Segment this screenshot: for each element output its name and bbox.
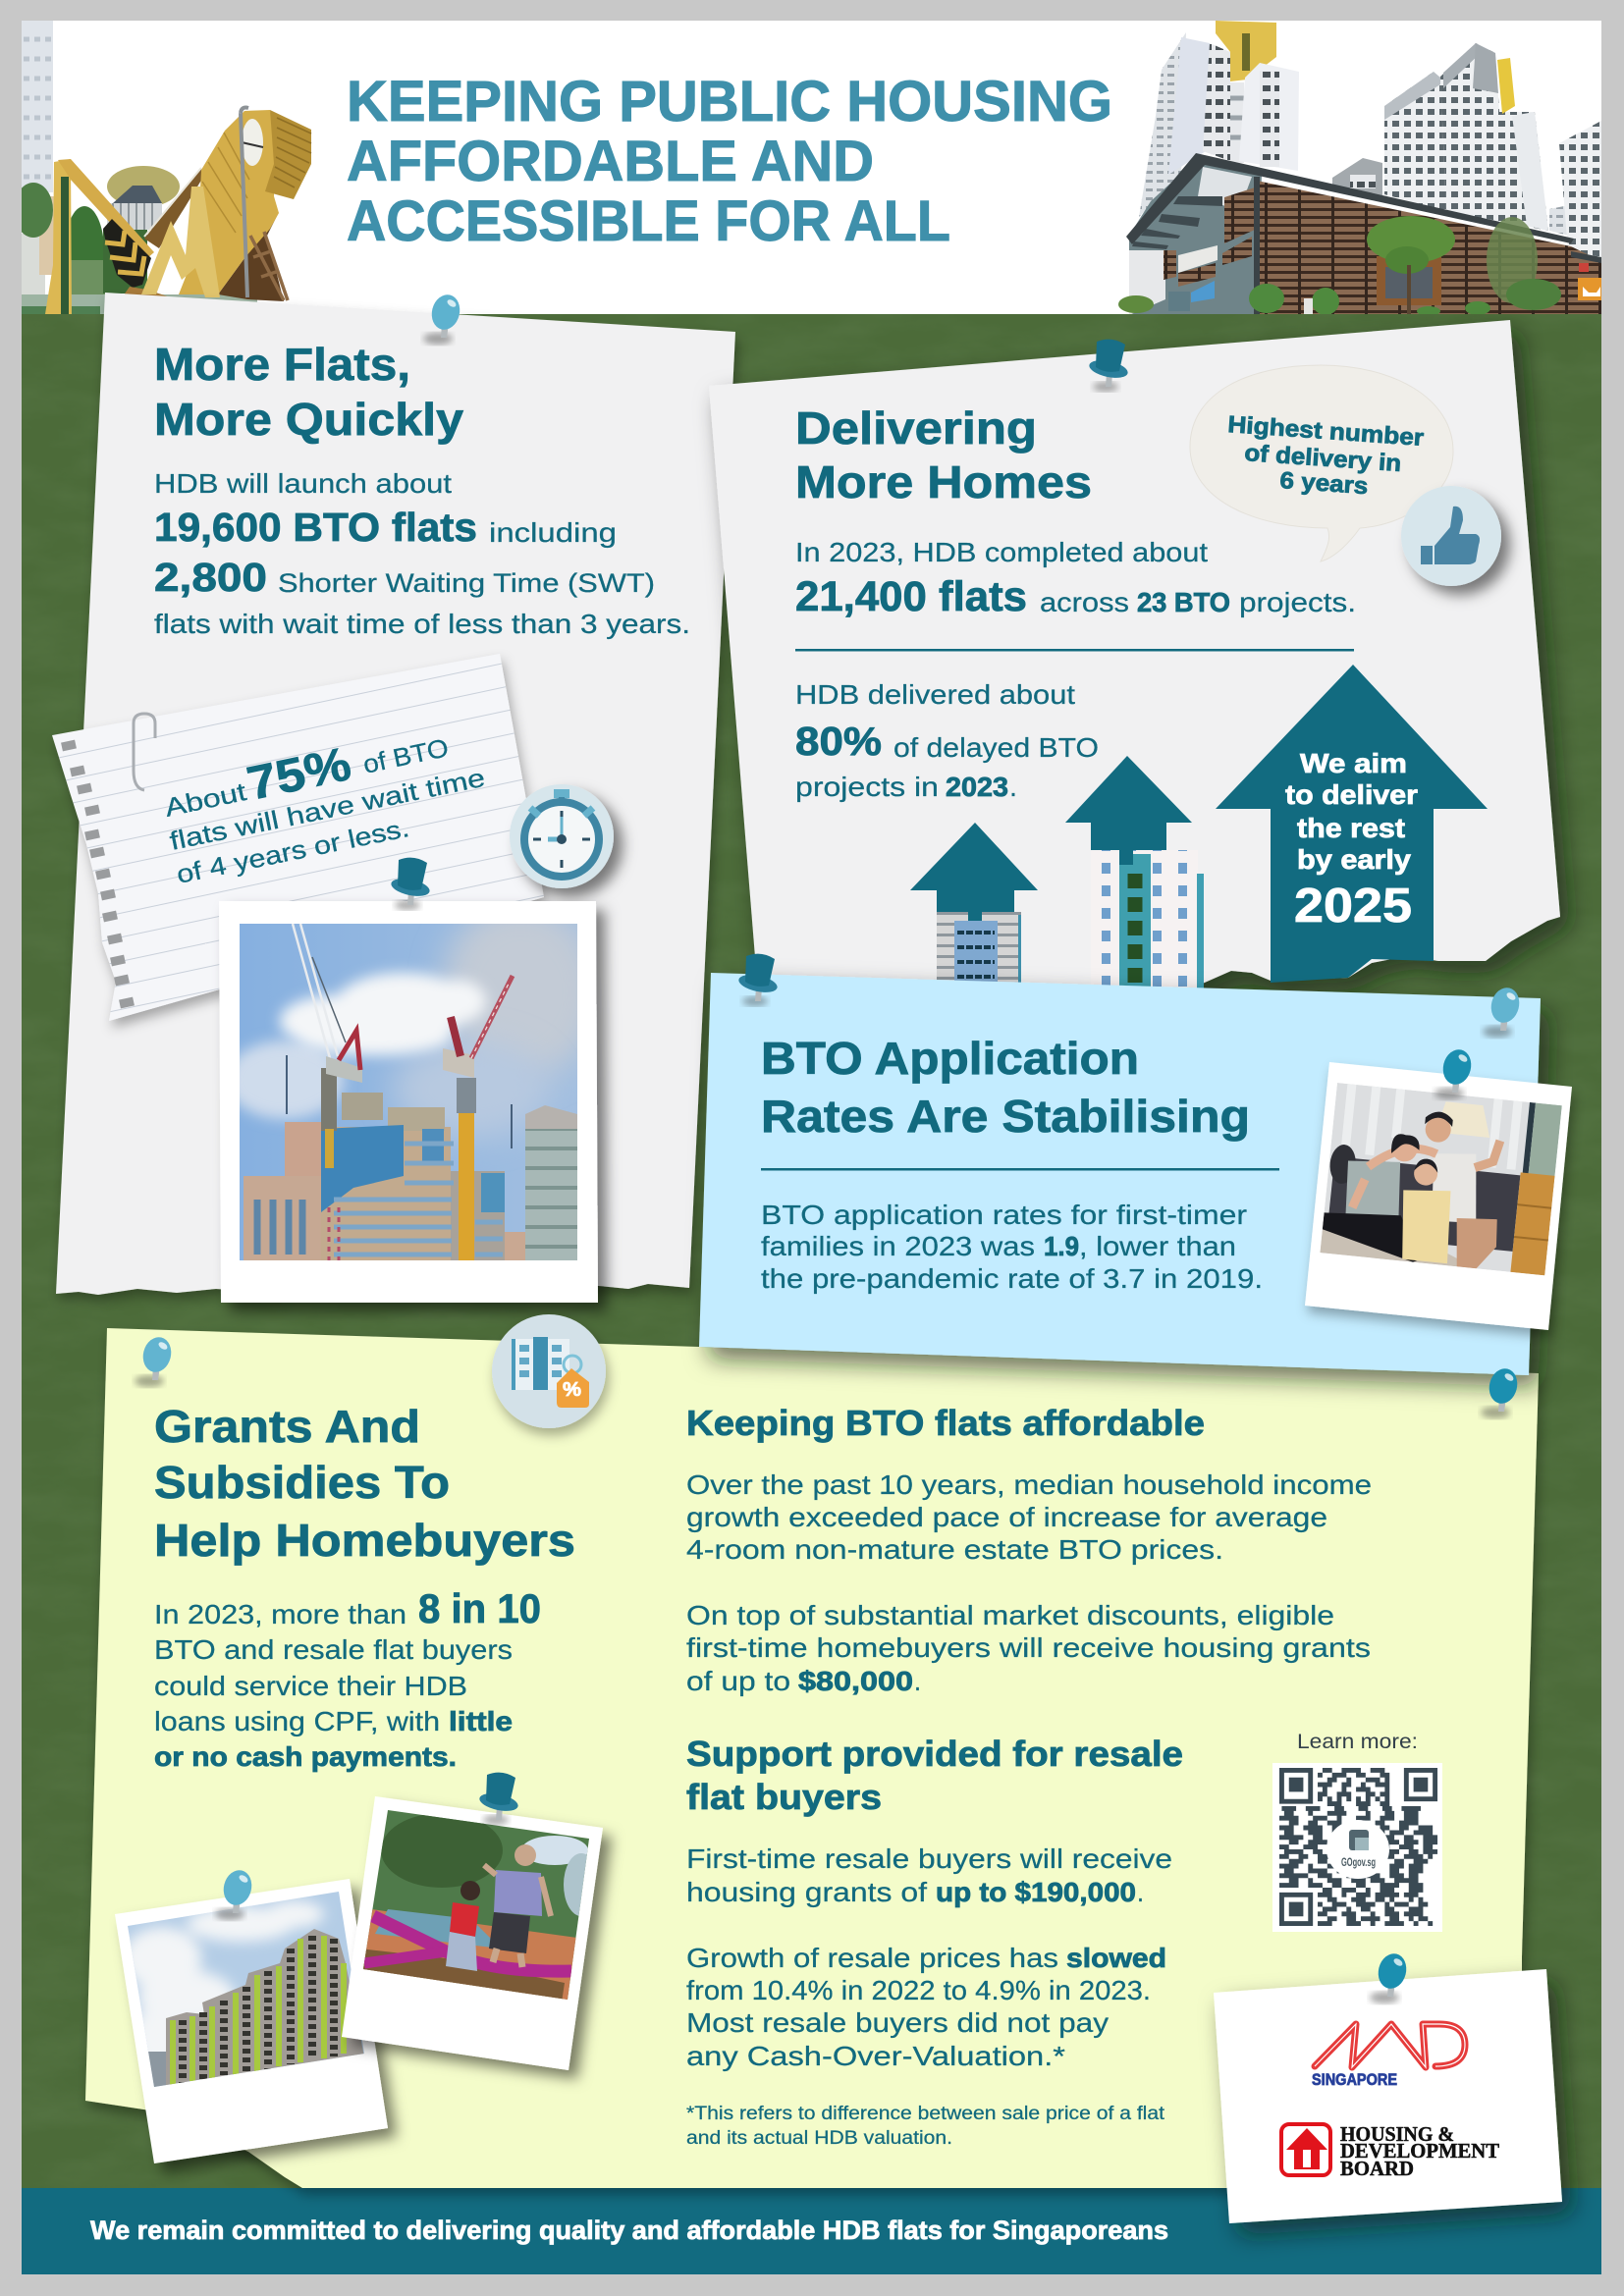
right column: keeping BTO flats affordable: Over the past 10 years, median household income [686, 1469, 1372, 1500]
note text: flats will have wait time [167, 763, 488, 856]
right column: keeping BTO flats affordable: first-time homebuyers will receive housing grants [686, 1632, 1371, 1663]
heading: More Flats, [154, 339, 410, 390]
heading: Grants And [154, 1401, 420, 1452]
body text: flats with wait time of less than 3 years. [154, 609, 690, 639]
pin [1435, 1046, 1475, 1099]
arrow text [1285, 748, 1418, 933]
body text: 8 in 10: loans using CPF, with [154, 1706, 440, 1736]
heading: Delivering [795, 402, 1037, 454]
footnote: *This refers to difference between sale price of a flat [686, 2104, 1165, 2124]
right column: support for resale flat buyers: Most resale buyers did not pay [686, 2007, 1109, 2038]
header title: AFFORDABLE AND [347, 130, 874, 193]
heading: More Homes [795, 456, 1092, 507]
right column: keeping BTO flats affordable: $80,000 [798, 1666, 913, 1696]
heading: More Quickly [154, 394, 463, 445]
body text: 8 in 10: little [449, 1706, 513, 1736]
pin [1088, 340, 1129, 392]
learn more label: Learn more: [1297, 1731, 1418, 1753]
right column: support for resale flat buyers [686, 1734, 1183, 2071]
body text: the pre-pandemic rate of 3.7 in 2019. [761, 1263, 1263, 1294]
polaroid: green HDB blocks [115, 1879, 388, 2163]
right column: keeping BTO flats affordable: Keeping BTO flats affordable [686, 1403, 1205, 1443]
arrow text: by early [1297, 844, 1411, 875]
polaroid: father and child at playground [342, 1796, 603, 2070]
body text: 8 in 10: could service their HDB [154, 1671, 467, 1701]
panel: grants and subsidies [85, 1314, 1539, 2188]
right column: keeping BTO flats affordable: of up to [686, 1666, 790, 1696]
body text: BTO application rates for first-timer [761, 1200, 1247, 1230]
delayed projects text: . [1009, 772, 1017, 802]
right column: support for resale flat buyers: slowed [1066, 1943, 1166, 1973]
delayed projects text: projects in [795, 772, 939, 802]
right column: support for resale flat buyers: Support provided for resale [686, 1734, 1183, 1774]
HDB logo [1281, 2122, 1499, 2180]
body text: 2,800 [154, 555, 267, 600]
pin [478, 1773, 519, 1825]
note text [162, 732, 488, 889]
right column: keeping BTO flats affordable: On top of substantial market discounts, eligible [686, 1600, 1334, 1630]
header photo: HDB blocks and mall [1118, 21, 1601, 316]
body text: HDB will launch about [154, 468, 452, 499]
large arrow: deliver the rest [1216, 665, 1488, 983]
callout: highest number of delivery [1190, 365, 1453, 561]
completed flats text: 21,400 flats [795, 573, 1027, 620]
body text: families in 2023 was [761, 1231, 1035, 1261]
delayed projects text: of delayed BTO [893, 732, 1099, 763]
heading [154, 339, 463, 445]
heading [795, 402, 1092, 507]
HDB logo: HOUSING & [1340, 2122, 1454, 2146]
HDB logo: BOARD [1340, 2157, 1414, 2180]
icon: building with discount tag [492, 1314, 606, 1428]
body text: 8 in 10: BTO and resale flat buyers [154, 1634, 513, 1665]
pin [423, 292, 463, 345]
panel: BTO application rates [699, 954, 1572, 1375]
pin [1483, 985, 1523, 1038]
completed flats text: In 2023, HDB completed about [795, 537, 1208, 567]
body text: 8 in 10: 8 in 10 [418, 1585, 541, 1631]
pin [215, 1867, 255, 1920]
heading: BTO Application [761, 1033, 1139, 1084]
body text [154, 468, 690, 639]
footnote: and its actual HDB valuation. [686, 2128, 952, 2149]
heading [154, 1401, 575, 1566]
right column: support for resale flat buyers: . [1137, 1877, 1144, 1907]
QR code [1272, 1763, 1442, 1932]
arrow text: to deliver [1285, 779, 1418, 810]
note text: 75% [243, 738, 355, 811]
note text: About [162, 776, 249, 823]
banner message: We remain committed to delivering quality and affordable HDB flats for Singaporeans [90, 2216, 1168, 2245]
completed flats text: projects. [1239, 587, 1356, 617]
right column: keeping BTO flats affordable: growth exceeded pace of increase for average [686, 1502, 1327, 1532]
panel: more flats, more quickly [52, 292, 735, 1303]
body text: 8 in 10 [154, 1585, 541, 1772]
body text: including [489, 517, 617, 548]
body text: 19,600 BTO flats [154, 505, 477, 550]
callout: highest number of delivery: of delivery in [1244, 440, 1402, 477]
delayed projects text [795, 679, 1099, 802]
right column: support for resale flat buyers: up to $190,000 [936, 1877, 1136, 1907]
header title: ACCESSIBLE FOR ALL [347, 189, 950, 253]
note text: of 4 years or less. [174, 813, 411, 889]
right column: keeping BTO flats affordable: 4-room non-mature estate BTO prices. [686, 1534, 1223, 1565]
delayed projects text: HDB delivered about [795, 679, 1075, 710]
polaroid: family [1305, 1062, 1572, 1330]
body text: 8 in 10: In 2023, more than [154, 1599, 406, 1629]
QR code: GOgov.sg [1341, 1855, 1376, 1869]
body text [761, 1200, 1263, 1294]
MND logo [1312, 2024, 1465, 2089]
heading: Help Homebuyers [154, 1515, 575, 1566]
MND logo: SINGAPORE [1312, 2070, 1397, 2089]
small building with arrow [910, 823, 1038, 992]
corkboard green background [22, 314, 1601, 2194]
header banner [14, 21, 1601, 316]
header title: KEEPING PUBLIC HOUSING [347, 70, 1112, 133]
delayed projects text: 2023 [946, 772, 1008, 802]
right column: support for resale flat buyers: housing grants of [686, 1877, 927, 1907]
callout: highest number of delivery: 6 years [1279, 467, 1369, 500]
pin [1370, 1950, 1410, 2003]
icon: building with discount tag: % [563, 1379, 581, 1401]
pin [135, 1334, 175, 1387]
completed flats text: across [1040, 587, 1129, 617]
medium building with arrow [1065, 756, 1204, 997]
icon: stopwatch [510, 784, 614, 888]
logo card [1214, 1950, 1562, 2223]
note text: of BTO [360, 732, 451, 779]
HDB logo: DEVELOPMENT [1340, 2139, 1499, 2163]
heading: Subsidies To [154, 1457, 450, 1508]
icon: paperclip [134, 714, 155, 790]
note paper: 75% [52, 654, 544, 1021]
delayed projects text: 80% [795, 719, 882, 764]
completed flats text: 23 BTO [1137, 587, 1230, 617]
right column: support for resale flat buyers: Growth of resale prices has [686, 1943, 1058, 1973]
bottom banner [22, 2188, 1601, 2274]
right column: support for resale flat buyers: First-time resale buyers will receive [686, 1843, 1172, 1874]
body text: 8 in 10: or no cash payments. [154, 1741, 457, 1772]
arrow text: We aim [1300, 748, 1407, 778]
heading [761, 1033, 1250, 1142]
pin [737, 954, 779, 1006]
right column: support for resale flat buyers: any Cash-Over-Valuation.* [686, 2041, 1065, 2071]
heading: Rates Are Stabilising [761, 1091, 1250, 1142]
body text: 1.9 [1044, 1231, 1079, 1261]
pin: yellow panel top right [1481, 1365, 1521, 1418]
header photo: playground grasshopper [14, 21, 311, 315]
arrow text: the rest [1297, 813, 1405, 843]
right column: keeping BTO flats affordable [686, 1403, 1372, 1696]
header title [347, 70, 1112, 253]
panel: delivering more homes [709, 320, 1560, 1001]
right column: keeping BTO flats affordable: . [914, 1666, 921, 1696]
footnote [686, 2104, 1165, 2149]
polaroid: construction cranes [219, 901, 599, 1303]
completed flats text [795, 537, 1356, 620]
icon: thumbs up [1401, 486, 1501, 586]
right column: support for resale flat buyers: flat buyers [686, 1777, 882, 1817]
pin [390, 858, 431, 910]
body text: , lower than [1079, 1231, 1236, 1261]
body text: Shorter Waiting Time (SWT) [278, 568, 655, 598]
arrow text: 2025 [1294, 880, 1412, 933]
right column: support for resale flat buyers: from 10.4% in 2022 to 4.9% in 2023. [686, 1975, 1151, 2005]
callout: highest number of delivery: Highest number [1227, 411, 1425, 452]
